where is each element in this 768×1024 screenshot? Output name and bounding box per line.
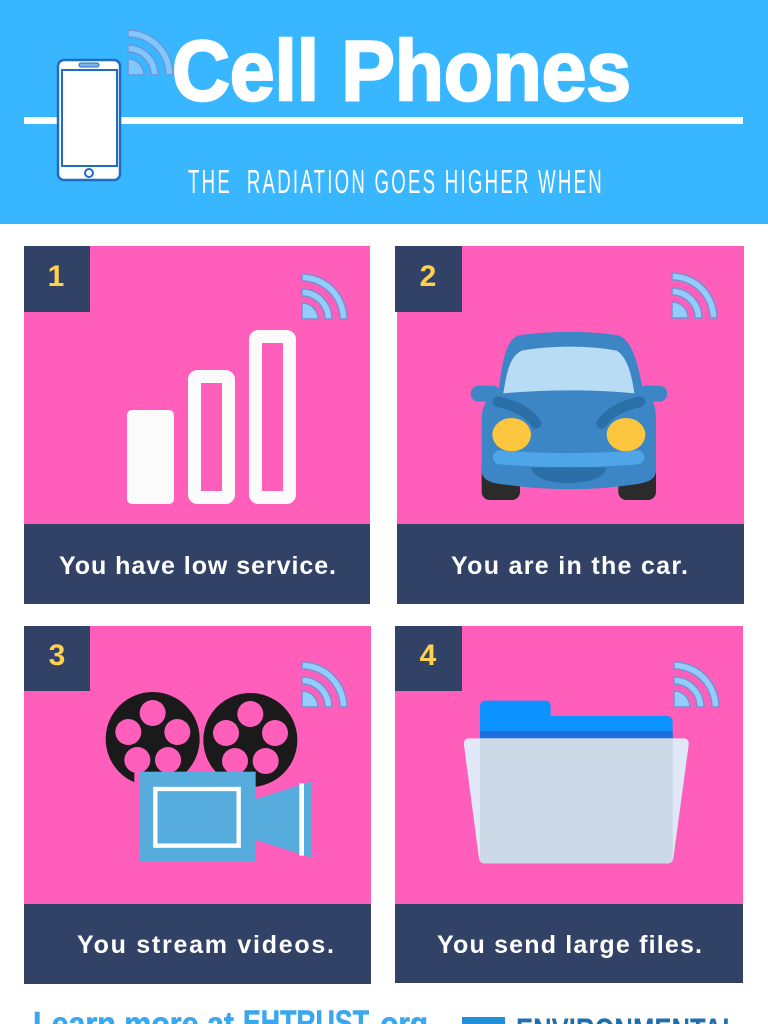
panel 1: low service [24,246,370,604]
panel 2: in the car [395,246,744,604]
number badge 2: 2 [420,260,436,293]
header divider line [24,117,743,124]
caption bar 3 [24,904,371,984]
icon: smartphone [58,60,120,180]
caption bar 1 [24,524,370,604]
icon: signal waves 1 [302,274,347,319]
icon: car [471,332,667,500]
panel 3: stream videos [24,626,371,984]
number badge 4 [395,626,462,691]
icon: signal bars [127,336,290,504]
caption bar 3: You stream videos. [77,931,334,959]
header banner [0,0,768,224]
icon: signal waves 4 [674,662,719,707]
caption bar 2: You are in the car. [451,552,688,580]
caption bar 4: You send large files. [437,931,702,959]
caption bar 2 [397,524,744,604]
number badge 1 [24,246,90,312]
number badge 1: 1 [48,260,64,293]
number badge 2 [395,246,462,312]
caption bar 4 [395,904,743,983]
panel 4: send large files [395,626,743,983]
number badge 3 [24,626,90,691]
caption bar 1: You have low service. [59,552,336,580]
icon: signal waves 2 [672,273,717,318]
number badge 4: 4 [420,639,437,672]
title: Cell Phones [172,24,631,119]
number badge 3: 3 [49,639,65,672]
icon: signal waves 3 [302,662,347,707]
footer link text [33,1004,428,1024]
icon: header signal waves [128,30,173,75]
icon: film camera [103,692,311,862]
icon: folder [464,701,689,863]
